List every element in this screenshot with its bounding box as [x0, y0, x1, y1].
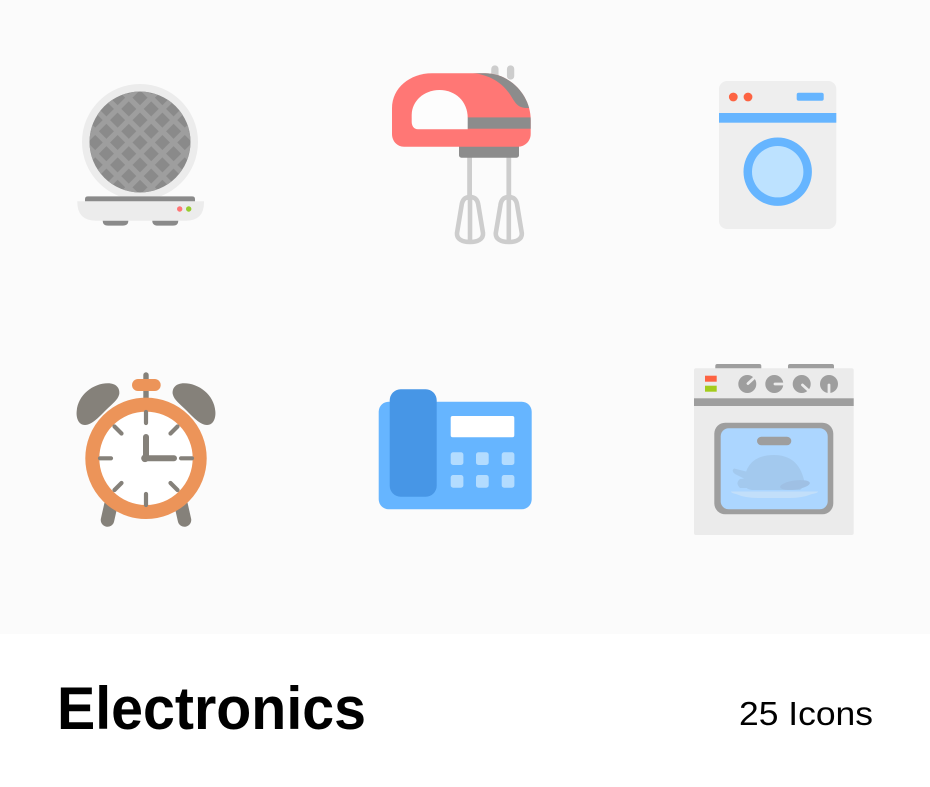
icon: waffle maker: [78, 84, 204, 226]
icon: washing machine: [719, 81, 836, 229]
heading: Electronics: Electronics: [57, 675, 366, 742]
panel: footer background: [0, 634, 930, 787]
infographic canvas: [60, 65, 872, 730]
icon: hand mixer: [392, 69, 535, 242]
icon: alarm clock: [77, 375, 215, 520]
roast chicken: [731, 455, 818, 498]
icon count label: 25 Icons: [739, 695, 873, 732]
icon: oven with roast chicken: [694, 364, 854, 535]
icon: desk telephone: [379, 389, 532, 509]
